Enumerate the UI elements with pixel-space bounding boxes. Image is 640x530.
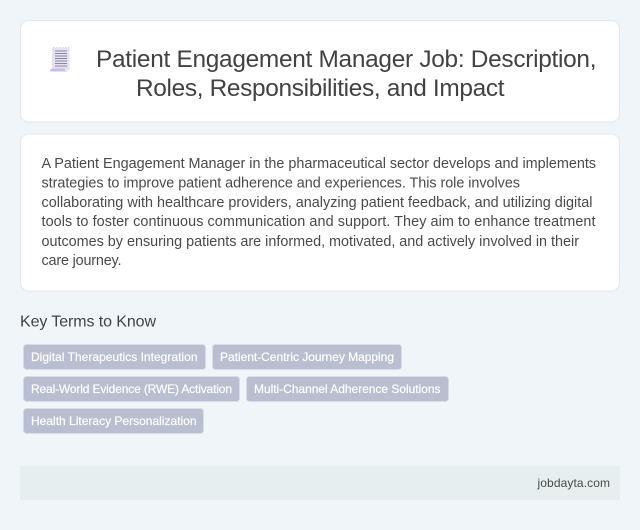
text block: description: tools to foster continuous communication and support. They aim to enhance treatment (42, 214, 596, 230)
tag: health literacy (24, 408, 204, 434)
icon: document scroll (50, 48, 70, 72)
heading: title (96, 46, 596, 102)
heading: title: Patient Engagement Manager Job: Description, (96, 46, 596, 73)
footer bar: jobdayta.com (536, 476, 610, 490)
text block: description: outcomes by ensuring patients are informed, motivated, and actively involved in their (42, 234, 579, 250)
tag: digital therapeutics: Digital Therapeutics Integration (31, 350, 198, 364)
heading: key terms: Key Terms to Know (20, 314, 156, 330)
tag: digital therapeutics (24, 344, 206, 370)
tag: health literacy: Health Literacy Personalization (31, 414, 196, 428)
text block: description: collaborating with healthcare providers, analyzing patient feedback, and utilizing digital (42, 195, 592, 211)
tag: patient-centric: Patient-Centric Journey Mapping (220, 350, 394, 364)
tag: patient-centric (212, 344, 402, 370)
footer bar (20, 466, 620, 500)
tag: real-world evidence: Real-World Evidence (RWE) Activation (31, 382, 232, 396)
text block: description: A Patient Engagement Manager in the pharmaceutical sector develops and implements (42, 156, 596, 172)
tag group: key terms (24, 344, 448, 434)
tag: multi-channel: Multi-Channel Adherence Solutions (254, 382, 440, 396)
heading: title: Roles, Responsibilities, and Impact (136, 75, 505, 102)
text block: description: strategies to improve patient adherence and experiences. This role involves (42, 176, 520, 192)
tag: multi-channel (246, 376, 448, 402)
tag: real-world evidence (24, 376, 240, 402)
text block: description: care journey. (42, 253, 122, 269)
text block: description (42, 156, 596, 269)
panel: title card (20, 20, 620, 122)
panel: description card (20, 134, 620, 291)
